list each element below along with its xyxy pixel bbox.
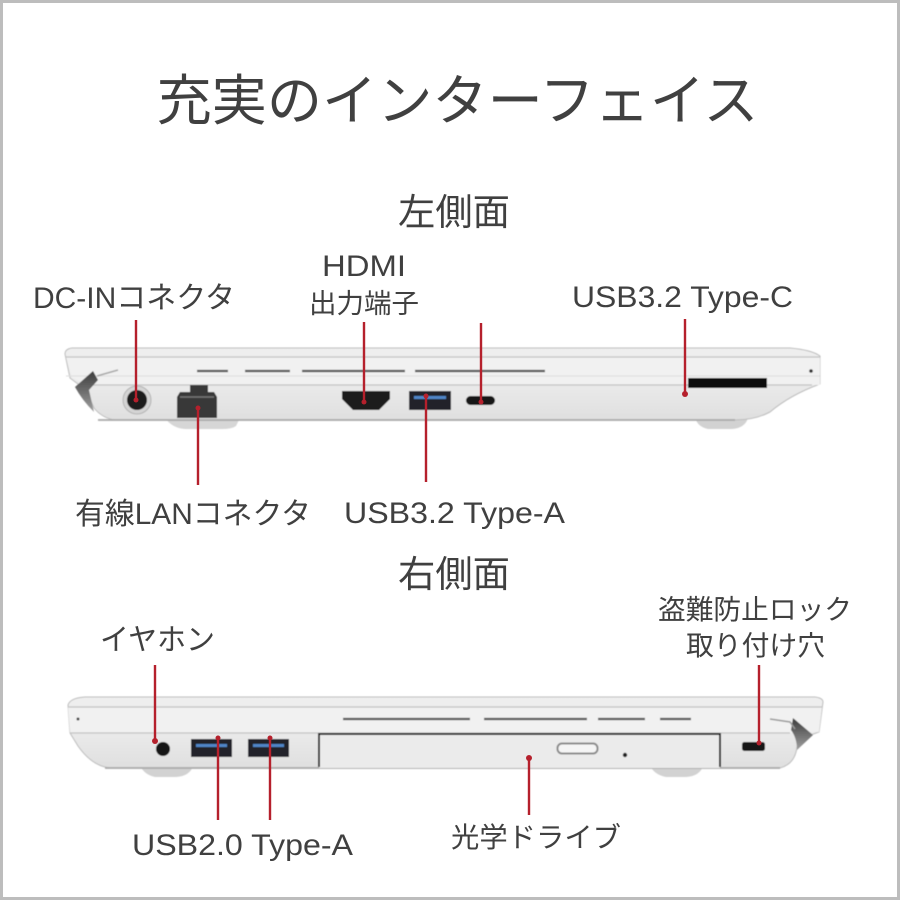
left foot [140,766,193,777]
pointer: USB2.0 port 1 [217,738,219,820]
heading: left side: 左側面 [398,192,510,233]
pointer: DC-IN [135,320,137,400]
USB2.0 Type-A port 2 [248,739,289,757]
pointer: optical drive [528,758,530,815]
hinge [791,718,813,750]
left foot [165,418,240,429]
label: earphone: イヤホン [100,624,215,657]
label: security lock hole: 盗難防止ロック [658,594,852,625]
title: 充実のインターフェイス [156,70,758,132]
DC-IN port [123,386,151,414]
label: DC-IN connector: DC-INコネクタ [33,282,235,315]
panel: left side laptop [65,348,820,429]
USB Type-A port [409,391,451,410]
pointer: lock [758,665,760,743]
label: USB2.0 Type-A: USB2.0 Type-A [132,829,353,862]
label: HDMI output: HDMI [322,250,406,283]
vents [197,370,545,372]
USB Type-C port [466,396,495,405]
heading: right side: 右側面 [398,554,510,595]
pointer: HDMI [363,322,365,402]
pointer: USB-C [480,323,482,402]
pointer: earphone [154,665,156,741]
lid band [68,707,822,733]
small dot [809,369,813,373]
label: wired LAN connector: 有線LANコネクタ [75,498,311,531]
label: HDMI output [309,250,419,319]
lid band [66,357,820,385]
laptop body [68,697,823,768]
pointer: LAN [197,408,199,485]
hinge [75,371,98,412]
right foot [650,766,703,777]
label: USB3.2 Type-A: USB3.2 Type-A [344,497,565,530]
LAN port [177,385,217,418]
SD card slot [688,378,767,388]
vents [343,718,691,720]
earphone jack [156,742,170,756]
pointer: card slot [684,319,686,394]
label: security lock hole [658,594,852,661]
red pointer lines: left side [134,319,688,485]
pointer: USB-A [425,396,427,482]
panel: right side laptop [68,697,823,777]
label: HDMI output: 出力端子 [309,289,419,319]
red pointer lines: right side [152,665,762,820]
HDMI port [342,391,390,410]
label: USB3.2 Type-C: USB3.2 Type-C [572,281,793,314]
USB2.0 Type-A port 1 [191,739,232,757]
pointer: USB2.0 port 2 [269,738,271,820]
right foot [695,418,748,429]
laptop body [65,348,820,420]
label: security lock hole: 取り付け穴 [686,630,825,661]
label: optical drive: 光学ドライブ [451,822,621,853]
optical drive [319,734,720,768]
security lock slot [742,742,765,751]
